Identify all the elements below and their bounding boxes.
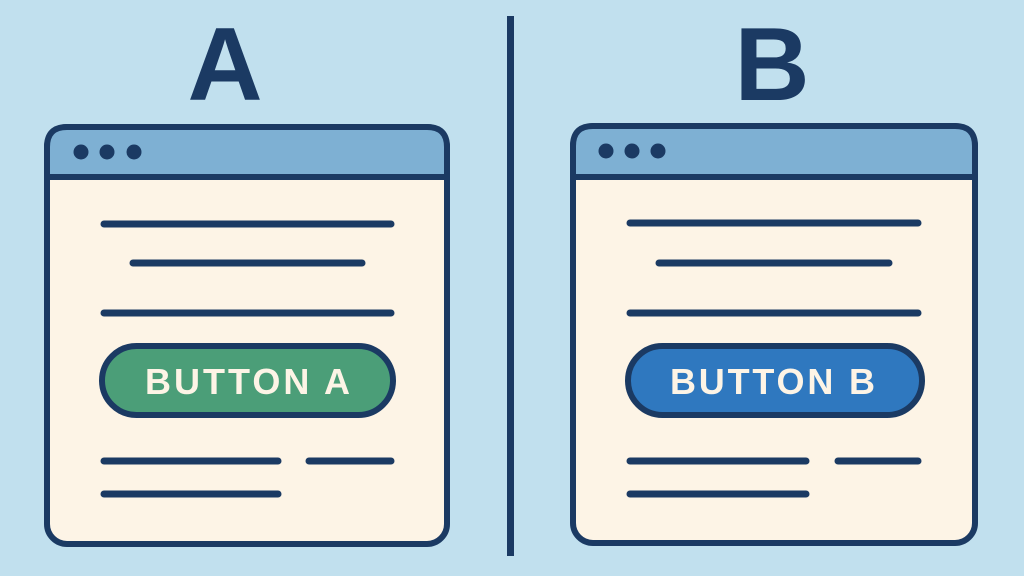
title: A: A	[187, 7, 263, 123]
title: B: B	[734, 7, 810, 123]
button A: BUTTON A	[145, 361, 350, 402]
divider line	[507, 16, 514, 556]
button B	[628, 346, 922, 415]
panel: variant A window	[47, 127, 447, 544]
icon: window dots A	[74, 144, 142, 160]
text lines A	[104, 224, 391, 494]
button B: BUTTON B	[670, 361, 875, 402]
panel: variant B window	[573, 126, 975, 543]
button A	[102, 346, 393, 415]
icon: window dots B	[598, 144, 666, 158]
text lines B	[630, 223, 918, 494]
